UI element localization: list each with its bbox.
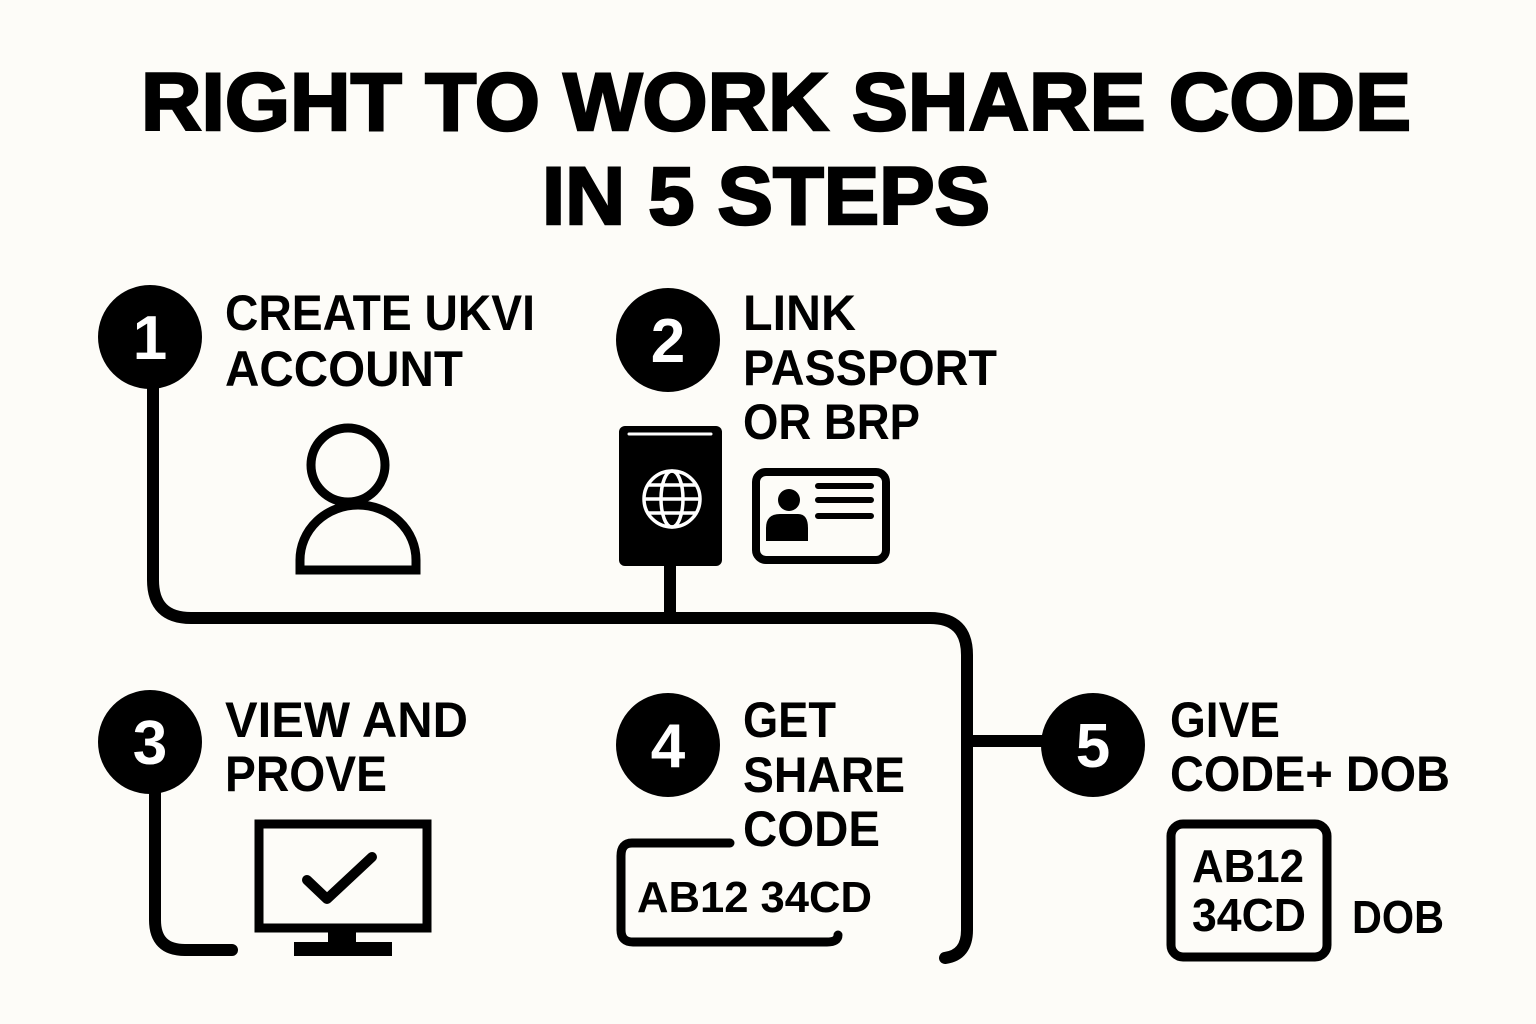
step 3	[98, 690, 468, 956]
step 3: PROVE	[225, 746, 387, 802]
step 2: PASSPORT	[743, 340, 997, 396]
step 1: 1	[133, 304, 167, 373]
code + DOB box: DOB	[1352, 891, 1444, 943]
step 3: VIEW AND	[225, 692, 468, 748]
icon: person	[300, 428, 416, 570]
step 4: GET	[743, 692, 836, 748]
share code box	[621, 843, 872, 942]
step 5: CODE+ DOB	[1170, 746, 1450, 802]
icon: passport	[619, 426, 722, 566]
icon: ID card	[756, 472, 886, 560]
code + DOB box: AB12	[1192, 840, 1304, 892]
step 2	[616, 285, 997, 566]
step 1: ACCOUNT	[225, 341, 463, 397]
step 2: OR BRP	[743, 394, 920, 450]
icon: monitor with check	[259, 824, 427, 956]
title: RIGHT TO WORK SHARE CODE	[141, 57, 1411, 148]
connector lines	[153, 370, 1050, 958]
step 2: LINK	[743, 285, 856, 341]
step 5: GIVE	[1170, 692, 1280, 748]
step 2: 2	[651, 307, 685, 376]
step 4: CODE	[743, 801, 880, 857]
step 5: 5	[1076, 712, 1110, 781]
step 1: CREATE UKVI	[225, 285, 535, 341]
step 4: SHARE	[743, 747, 905, 803]
share code box: AB12 34CD	[637, 873, 872, 922]
step 5	[1041, 692, 1450, 957]
code + DOB box	[1171, 824, 1444, 957]
title	[141, 57, 1411, 242]
code + DOB box: 34CD	[1192, 889, 1306, 941]
title: IN 5 STEPS	[542, 151, 990, 242]
step 3: 3	[133, 709, 167, 778]
step 4	[616, 692, 905, 942]
step 4: 4	[651, 712, 686, 781]
step 1	[98, 285, 535, 570]
